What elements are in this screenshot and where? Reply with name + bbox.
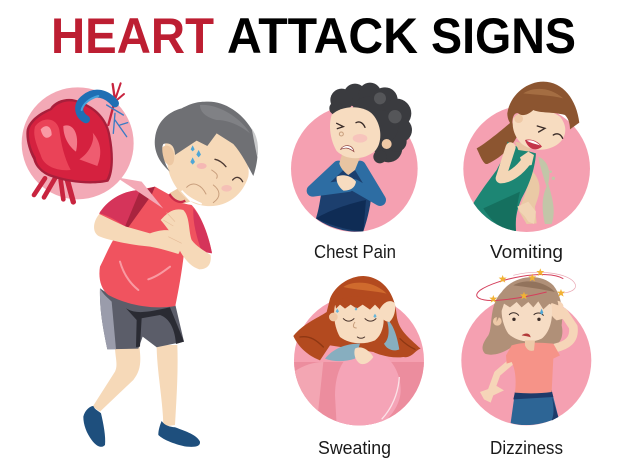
title: [51, 8, 576, 64]
label: chest pain: Chest Pain: [314, 242, 396, 262]
title: ATTACK: [227, 8, 418, 64]
arm on forehead: [384, 321, 399, 350]
face details: [509, 313, 543, 315]
panel: chest pain: [291, 83, 418, 232]
shirt: [99, 187, 212, 307]
face: [330, 107, 380, 158]
head: [513, 109, 565, 150]
mouth and eyes: [525, 140, 542, 149]
hair: [507, 82, 579, 129]
hair: [155, 102, 258, 176]
vomit: [538, 157, 554, 224]
arms and hands: [94, 209, 211, 269]
label: sweating: Sweating: [318, 438, 391, 458]
head: [502, 297, 552, 341]
neck: [169, 183, 190, 203]
pink circle: [461, 295, 591, 425]
blanket: [294, 362, 424, 426]
ponytail: [477, 122, 518, 164]
dizzy orbit and stars: [477, 268, 576, 303]
label: dizziness: Dizziness: [490, 438, 563, 458]
near arm and hand: [501, 147, 527, 178]
face details: [343, 319, 376, 338]
panel: vomiting: [463, 82, 590, 232]
skirt: [511, 390, 558, 425]
hair: [293, 276, 421, 360]
curly hair: [329, 83, 412, 163]
far arm: [518, 170, 540, 224]
pink circle: [291, 105, 418, 232]
shirt: [506, 343, 560, 393]
dress: [473, 142, 536, 231]
arms: [490, 361, 512, 394]
figure: girl vomiting: [473, 82, 579, 231]
panel: sweating: [293, 276, 427, 429]
legs: [93, 345, 178, 427]
hair back: [483, 277, 562, 355]
panel: dizziness: [461, 268, 591, 425]
pink circle: [294, 295, 424, 425]
title: HEART: [51, 8, 214, 64]
neck: [515, 142, 532, 152]
heart callout: [22, 83, 134, 202]
shorts: [100, 288, 184, 349]
tears: [190, 145, 201, 165]
head: [155, 102, 258, 206]
coronary vessels: [79, 94, 115, 119]
callout pointer: [117, 177, 163, 209]
face details: [197, 163, 207, 169]
head: [334, 302, 384, 343]
figure: person clutching chest: [313, 83, 412, 232]
heart organ: [26, 99, 113, 183]
figure: girl with dizziness: [477, 268, 576, 425]
label: vomiting: Vomiting: [490, 242, 563, 262]
arteries: [34, 83, 124, 202]
pink circle: [463, 105, 590, 232]
title: SIGNS: [431, 8, 576, 64]
main figure: man having a heart attack: [22, 83, 258, 447]
hand below: [517, 202, 536, 224]
sleeve and hand on blanket: [325, 344, 360, 361]
shoes: [83, 406, 200, 447]
hair fringe: [497, 285, 558, 322]
shirt sleeve shading: [99, 190, 150, 227]
